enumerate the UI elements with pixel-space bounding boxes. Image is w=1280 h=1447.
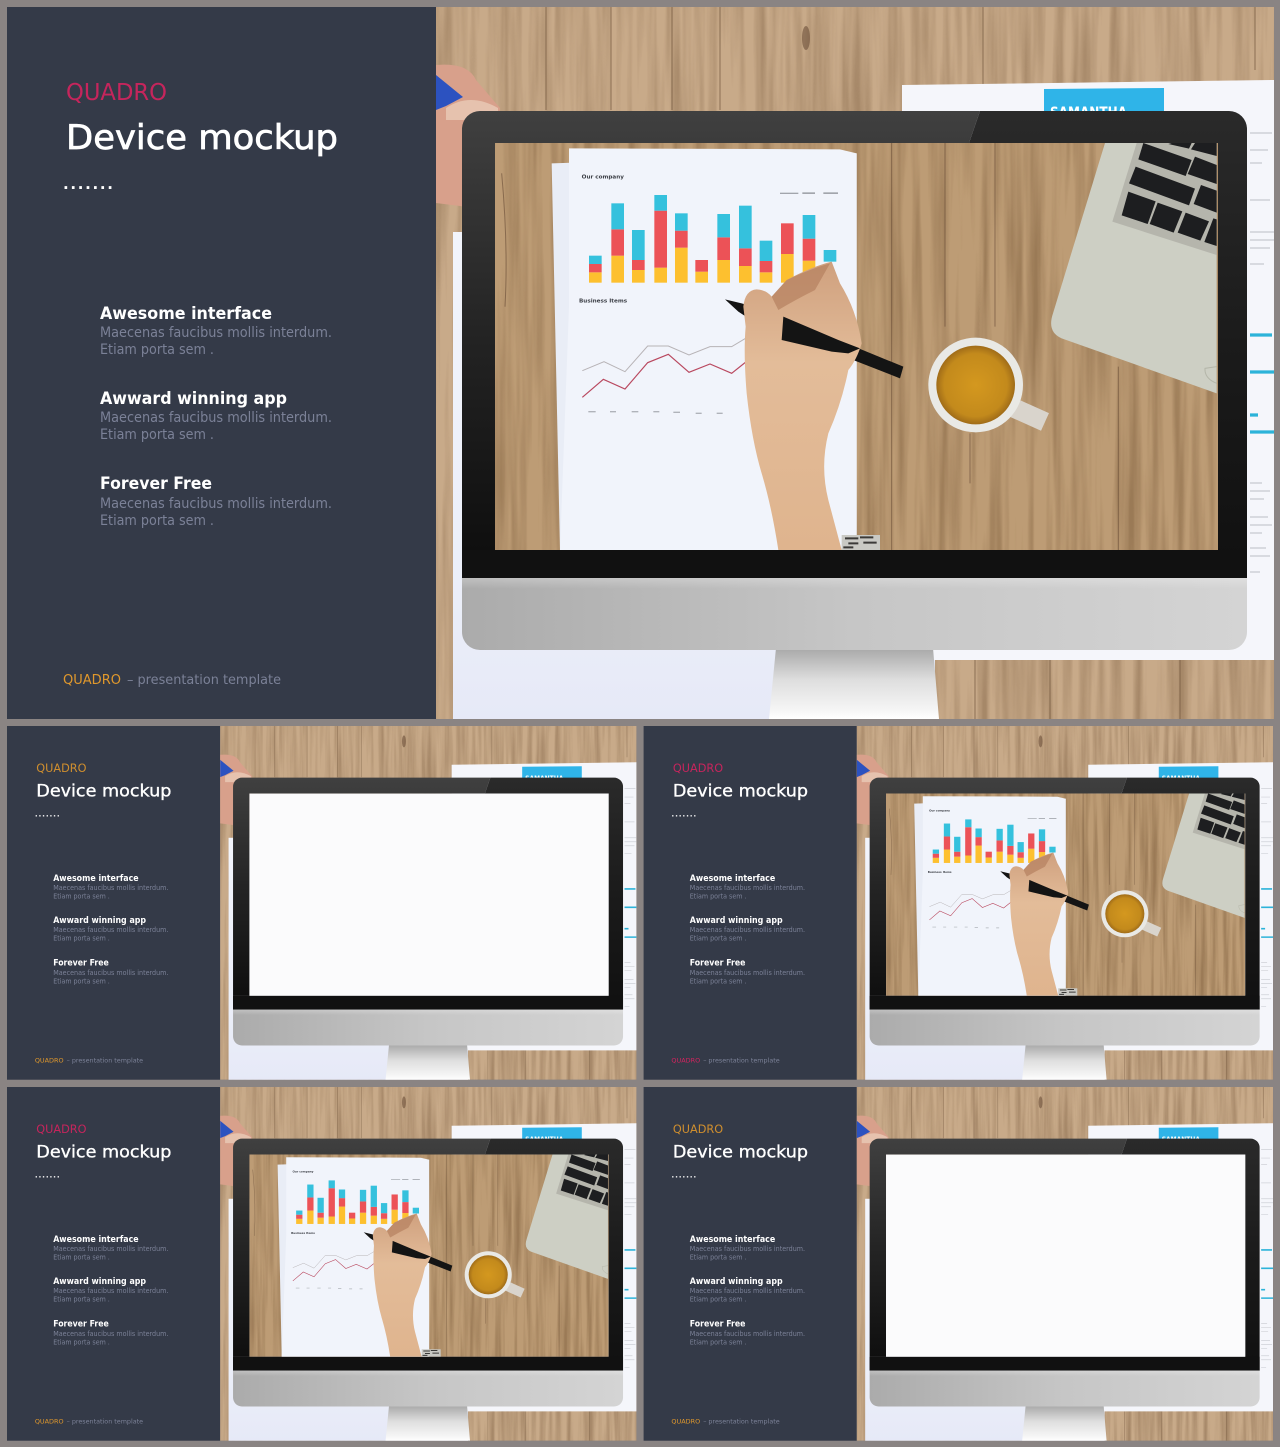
feature 2: Maecenas faucibus mollis interdum. (100, 410, 332, 426)
slide 5: blank screen, orange accents (644, 1087, 1273, 1442)
icon: coffee cup (928, 338, 1045, 432)
panel: left navy sidebar (7, 1087, 220, 1441)
feature 1: Maecenas faucibus mollis interdum. (100, 325, 332, 341)
feature list: Etiam porta sem . (53, 977, 110, 985)
footer: – presentation template (67, 1417, 143, 1425)
feature list: Etiam porta sem . (53, 935, 110, 943)
feature list: Awesome interface (53, 873, 139, 883)
feature list: Etiam porta sem . (690, 935, 746, 943)
feature list: Etiam porta sem . (53, 1338, 110, 1346)
blank screen (886, 1155, 1245, 1357)
feature list: Awward winning app (690, 915, 783, 925)
feature list: Maecenas faucibus mollis interdum. (53, 1245, 168, 1253)
screen photo (249, 1155, 609, 1357)
section label: QUADRO: QUADRO (36, 1122, 86, 1136)
feature list: Awward winning app (690, 1276, 783, 1286)
feature list: Forever Free (53, 1318, 109, 1328)
monitor body (462, 111, 1247, 650)
slide 1: main large slide (7, 7, 1274, 722)
dotted divider: ....... (35, 1170, 60, 1179)
feature list: Forever Free (690, 1318, 746, 1328)
feature list: Etiam porta sem . (53, 1296, 110, 1304)
laptop (1051, 143, 1217, 393)
footer: – presentation template (67, 1056, 143, 1064)
feature list: Maecenas faucibus mollis interdum. (53, 1330, 168, 1338)
dotted divider: ....... (63, 175, 113, 193)
feature list: Maecenas faucibus mollis interdum. (53, 1287, 168, 1295)
footer: – presentation template (703, 1417, 780, 1425)
feature list: Awesome interface (690, 873, 775, 883)
feature list: Awward winning app (53, 915, 146, 925)
feature 2: Awward winning app (100, 389, 287, 409)
section label: QUADRO: QUADRO (66, 80, 167, 106)
feature list: Etiam porta sem . (690, 1296, 746, 1304)
scene: desk with monitor (436, 7, 1274, 722)
feature 3 (100, 474, 332, 529)
feature list (53, 1234, 168, 1346)
feature list: Maecenas faucibus mollis interdum. (690, 1330, 805, 1338)
feature list: Maecenas faucibus mollis interdum. (690, 1287, 805, 1295)
monitor stand (769, 648, 939, 719)
feature 1: Etiam porta sem . (100, 342, 214, 358)
feature 3: Maecenas faucibus mollis interdum. (100, 496, 332, 512)
feature list: Awesome interface (690, 1234, 775, 1244)
chart title: Our company (582, 175, 624, 181)
feature list (53, 873, 168, 985)
panel: left navy sidebar (644, 726, 857, 1080)
feature list: Maecenas faucibus mollis interdum. (690, 1245, 805, 1253)
title: Device mockup (36, 781, 171, 801)
feature list (690, 1234, 805, 1346)
section label: QUADRO: QUADRO (673, 761, 723, 775)
feature 1: Awesome interface (100, 304, 272, 324)
title: Device mockup (66, 118, 338, 158)
slide 2: blank screen, orange accents (7, 726, 636, 1081)
section label: QUADRO: QUADRO (36, 761, 86, 775)
footer: – presentation template (127, 673, 281, 688)
panel: left navy sidebar (7, 7, 436, 719)
dotted divider: ....... (671, 809, 696, 818)
footer: QUADRO (671, 1417, 700, 1425)
feature list: Etiam porta sem . (690, 1253, 746, 1261)
feature list (100, 304, 332, 529)
dotted divider: ....... (671, 1170, 696, 1179)
footer: QUADRO (63, 673, 121, 688)
paper: left sheet (453, 232, 935, 722)
panel: left navy sidebar (644, 1087, 857, 1441)
dotted divider: ....... (35, 809, 60, 818)
feature 2 (100, 389, 332, 443)
title: Device mockup (673, 1142, 808, 1162)
footer: QUADRO (671, 1056, 700, 1064)
feature list (690, 873, 805, 985)
icon: hand holding blue pen (436, 65, 500, 215)
stacked bar chart (589, 195, 836, 283)
section label: QUADRO: QUADRO (673, 1122, 723, 1136)
panel: left navy sidebar (7, 726, 220, 1080)
slide 3: photo screen, pink accents (644, 726, 1273, 1081)
feature list: Etiam porta sem . (53, 892, 110, 900)
chart subtitle: Business Items (579, 299, 628, 305)
slide 4: photo screen, pink title, orange footer (7, 1087, 636, 1442)
feature list: Etiam porta sem . (690, 892, 746, 900)
wood background (495, 143, 1218, 550)
scene: desk with monitor (220, 726, 636, 1081)
feature list: Awward winning app (53, 1276, 146, 1286)
title: Device mockup (36, 1142, 171, 1162)
blank screen (249, 794, 609, 996)
title: Device mockup (673, 781, 808, 801)
feature list: Maecenas faucibus mollis interdum. (53, 969, 168, 977)
feature 1 (100, 304, 332, 358)
feature list: Awesome interface (53, 1234, 139, 1244)
icon: writing hand (743, 262, 862, 550)
footer: QUADRO (35, 1056, 64, 1064)
footer: QUADRO (35, 1417, 64, 1425)
feature list: Forever Free (53, 957, 109, 967)
feature 3: Etiam porta sem . (100, 513, 214, 529)
screen photo: desk with charts (495, 143, 1218, 550)
scene: desk with monitor (220, 1087, 636, 1442)
scene: desk with monitor (857, 726, 1273, 1081)
pen (725, 299, 903, 378)
paper: report sheets (552, 148, 857, 550)
speckled corner object (842, 535, 880, 550)
screen photo (886, 794, 1245, 996)
chart legend (780, 192, 838, 194)
feature list: Maecenas faucibus mollis interdum. (53, 926, 168, 934)
line chart (582, 337, 748, 413)
feature 2: Etiam porta sem . (100, 427, 214, 443)
feature list: Forever Free (690, 957, 746, 967)
feature list: Etiam porta sem . (690, 977, 746, 985)
feature list: Maecenas faucibus mollis interdum. (690, 884, 805, 892)
feature list: Maecenas faucibus mollis interdum. (690, 969, 805, 977)
feature list: Etiam porta sem . (690, 1338, 746, 1346)
feature list: Maecenas faucibus mollis interdum. (53, 884, 168, 892)
feature list: Etiam porta sem . (53, 1253, 110, 1261)
footer: – presentation template (703, 1056, 780, 1064)
paper: resume sheet: SAMANTHA (1050, 105, 1127, 121)
scene: desk with monitor (857, 1087, 1273, 1442)
paper: resume sheet (902, 80, 1274, 660)
feature list: Maecenas faucibus mollis interdum. (690, 926, 805, 934)
feature 3: Forever Free (100, 474, 212, 494)
wood desk background (436, 7, 1274, 719)
